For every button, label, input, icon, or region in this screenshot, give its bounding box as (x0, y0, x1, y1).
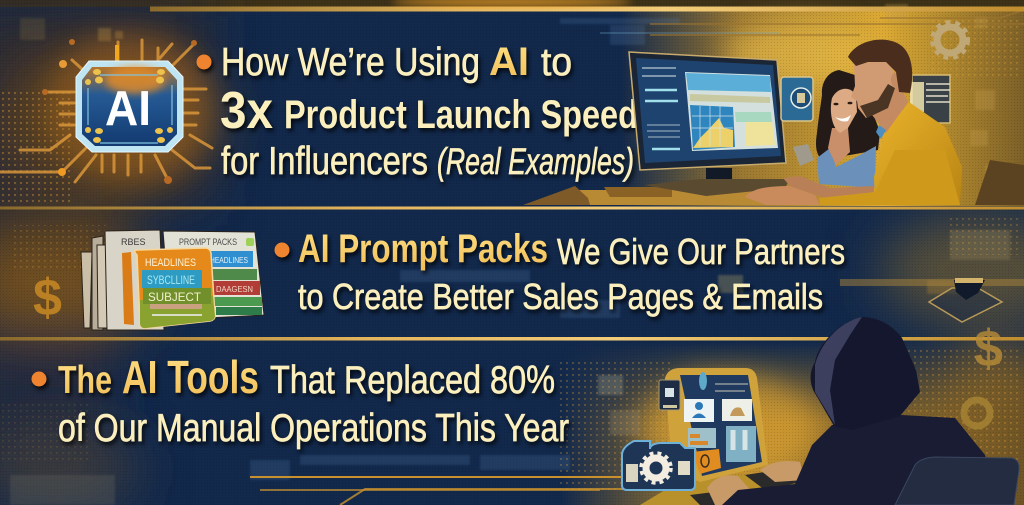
orange headlines card: HEADLINES (145, 257, 196, 269)
monitor sidebar (642, 68, 680, 137)
headline 1 (196, 40, 638, 183)
headline 1: to (541, 41, 572, 84)
line 1: How We’re Using (221, 41, 480, 84)
man beard (860, 84, 895, 118)
collar (876, 125, 886, 139)
line 2: 3x (220, 82, 273, 140)
bullet (196, 54, 212, 70)
hands (760, 461, 805, 482)
line 2: of Our Manual Operations This Year (58, 407, 569, 450)
headline 1: (Real Examples) (437, 141, 634, 182)
hood (811, 317, 920, 430)
orange headlines card: SYBCLLINE (147, 273, 195, 287)
headline 2 (274, 227, 845, 317)
woman (816, 70, 880, 188)
small right card: HEADLINES (210, 256, 248, 265)
hands (745, 186, 820, 205)
headline 3: That Replaced 80% (270, 359, 555, 402)
dollar sign left: $ (33, 269, 62, 327)
line 1: The (58, 359, 112, 402)
chair (895, 457, 1019, 505)
illustration: monitor and couple (523, 22, 1024, 205)
circuit lines bottom (250, 477, 660, 505)
gold divider lines (0, 0, 1024, 340)
keyboard (745, 468, 810, 490)
keyboard (644, 179, 790, 196)
wall card with icon (781, 77, 813, 121)
tablet (659, 368, 768, 482)
orange headlines card: SUBJECT (148, 290, 202, 304)
chip body (76, 61, 183, 152)
card in hand (793, 144, 814, 166)
headline 1: AI (489, 40, 529, 84)
man hair (848, 40, 912, 93)
small right card (205, 251, 262, 315)
desk (530, 190, 830, 205)
man neck (868, 82, 908, 133)
chair back (975, 160, 1024, 205)
man face (851, 60, 897, 118)
line 1: AI Prompt Packs (298, 227, 548, 271)
monitor chart panel (685, 72, 778, 151)
small right card: DAAGESN (216, 285, 253, 294)
man (745, 40, 962, 205)
man ear (891, 73, 899, 87)
headline 2: We Give Our Partners (557, 231, 845, 272)
icon: prompt packs: PROMPT PACKS (179, 237, 237, 248)
woman smile (835, 115, 851, 122)
man shirt (874, 102, 962, 205)
side card (659, 380, 680, 410)
headline 3 (32, 351, 569, 450)
icon: diamond badge and dollar right (840, 278, 1024, 426)
icon: diamond badge and dollar right: $ (974, 320, 1003, 378)
icon: AI chip (0, 33, 215, 184)
woman shirt (817, 146, 876, 188)
gear box (622, 441, 695, 490)
back pages (81, 252, 92, 328)
monitor (629, 52, 786, 170)
headline 3: AI Tools (122, 351, 259, 403)
man arm (819, 150, 960, 205)
line 2: to Create Better Sales Pages & Emails (298, 276, 823, 317)
woman neck (828, 128, 850, 165)
chip traces (0, 40, 212, 182)
woman arm (783, 176, 874, 198)
page labels: RBES (121, 237, 146, 247)
gear (937, 27, 963, 53)
hooded figure body (722, 415, 1000, 505)
illustration: tablet and hooded figure (622, 317, 1019, 505)
bullet (32, 372, 46, 386)
woman face (831, 89, 857, 133)
headline 1: Product Launch Speed (284, 93, 638, 137)
orange headlines card (122, 248, 215, 328)
line 3: for Influencers (221, 140, 428, 183)
chip label: AI (105, 82, 151, 136)
icon: prompt packs (81, 230, 264, 330)
woman hair (816, 70, 880, 158)
wall panel right (912, 75, 950, 123)
desk (640, 475, 800, 505)
bullet (274, 242, 290, 258)
